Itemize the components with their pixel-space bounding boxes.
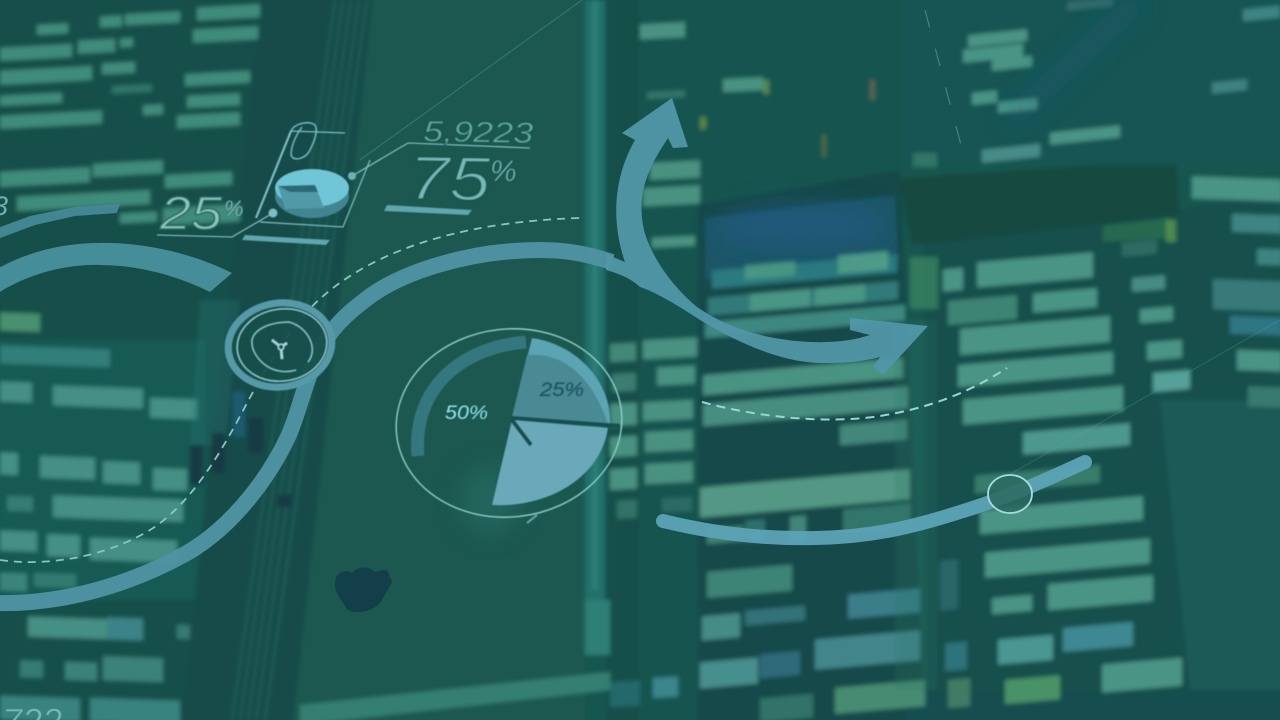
double arrow [606, 98, 928, 375]
blue facade [705, 195, 898, 280]
left lower building windows [0, 313, 197, 720]
pie [275, 174, 349, 218]
mini pie data callout [157, 116, 533, 245]
dark roof [898, 160, 1180, 245]
value 75: 75 [408, 144, 492, 214]
column and upper middle block [640, 0, 900, 720]
dashed curve: right [702, 368, 1007, 420]
central tower strip [585, 0, 605, 600]
road band [180, 0, 374, 720]
donut chart [387, 318, 631, 528]
marker ring [988, 475, 1032, 513]
right building body [925, 190, 1280, 720]
green side glow [910, 257, 938, 309]
paperclip [291, 123, 316, 159]
25% wedge lower [492, 420, 608, 505]
curve: left lower arc [0, 243, 232, 295]
25% wedge [512, 338, 610, 424]
bar 75 [384, 205, 472, 215]
pointer [512, 420, 531, 445]
dashed curve: long sweep [0, 218, 580, 562]
road lane lines [232, 0, 375, 720]
label 50: 50% [445, 403, 488, 424]
icon: dark shield [335, 567, 392, 612]
notch [527, 515, 537, 523]
clock badge [223, 296, 337, 394]
inner shade [512, 355, 608, 424]
grey progress arc [418, 342, 526, 456]
left building mass [0, 0, 262, 720]
leader 25 [157, 213, 273, 237]
frame [260, 131, 370, 227]
top right windows [963, 0, 1280, 165]
main sweeping curve [0, 250, 612, 603]
value 5,9223: 5,9223 [423, 116, 533, 150]
central tower [292, 0, 585, 720]
middle building shadow [698, 170, 925, 720]
left teal reflection strip [190, 300, 240, 445]
outer ring [387, 318, 631, 528]
left bright floors band [0, 340, 205, 600]
curve: left upper arc [0, 204, 120, 240]
road vehicles [190, 392, 292, 507]
value 25: 25 [159, 187, 222, 239]
label 25: 25% [539, 380, 584, 401]
green roof glow [1103, 218, 1172, 242]
percent 75: % [490, 155, 517, 188]
right building windows [940, 237, 1190, 710]
light rays [360, 0, 1280, 480]
central tower base [300, 672, 610, 720]
lower curve with marker [663, 462, 1085, 538]
right edge windows [1192, 176, 1280, 408]
centre column windows [610, 18, 763, 707]
divider [512, 418, 620, 426]
lower right plain facade [1160, 400, 1280, 690]
top-left building windows [0, 4, 260, 234]
middle building windows [700, 248, 925, 720]
coloured window accents [700, 80, 1176, 242]
top right mass [905, 0, 1280, 165]
bar 25 [242, 235, 330, 245]
percent 25: % [224, 196, 244, 221]
soft glow patches [460, 0, 1140, 535]
leader 75 [352, 143, 530, 176]
